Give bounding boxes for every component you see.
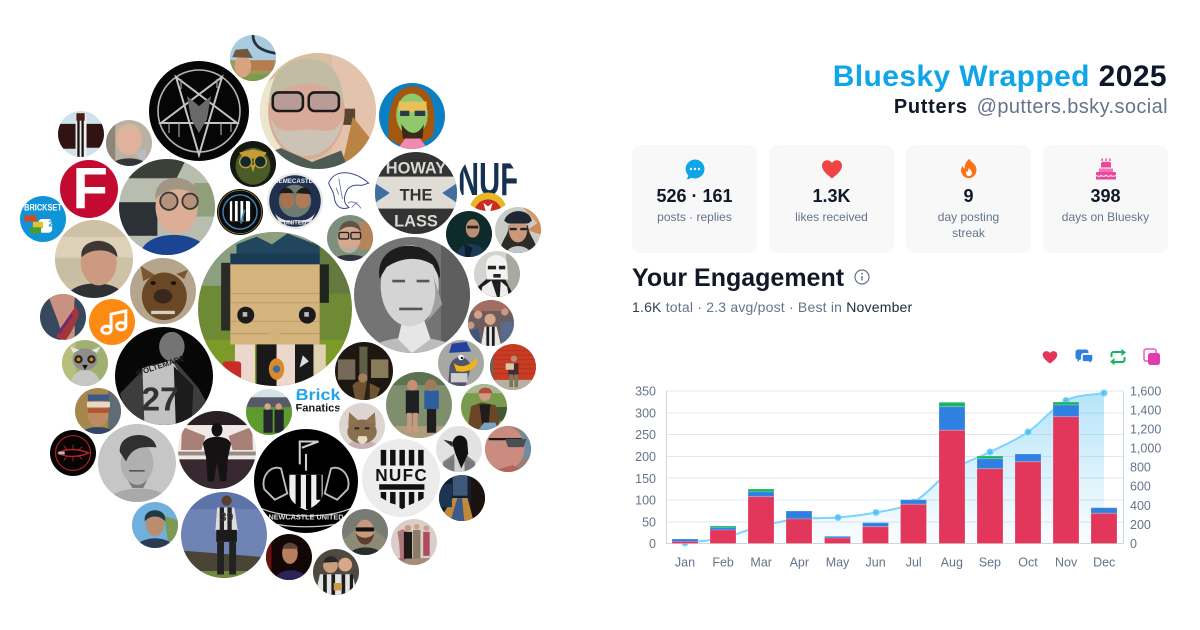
avatar: Brickset logo [20, 196, 66, 242]
stat card: days on Bluesky: 398 [1090, 186, 1121, 206]
bar: Apr [786, 511, 812, 544]
right axis labels: 1,600 [1130, 384, 1161, 398]
avatar: man with hat and jacket in park [461, 384, 507, 430]
avatar: shaggy dog puppet [130, 258, 196, 324]
avatar: blue-line dog sketch [328, 172, 370, 209]
avatar: footballer Woltemade number 27: WOLTEMADE [135, 354, 186, 378]
avatar: man with glasses on a bus [119, 159, 215, 255]
avatar: footballer Woltemade number 27 [115, 327, 213, 425]
month labels: Jun [866, 556, 886, 570]
avatar: man with cap and glasses [495, 207, 541, 253]
profile name and handle: Putters @putters.bsky.social [894, 96, 1168, 118]
avatar: Brick Fanatics logo [295, 378, 341, 424]
month labels: May [826, 556, 850, 570]
month labels: Jul [906, 556, 922, 570]
avatar: tattoo on skin [40, 294, 86, 340]
icon: heart [820, 158, 842, 180]
avatar: Howay The Lass [375, 152, 457, 234]
avatar: red lobster badge [50, 430, 96, 476]
month labels: Feb [712, 556, 734, 570]
stat card: day posting streak: streak [952, 226, 985, 240]
avatar: bald man smiling [106, 120, 152, 166]
left axis labels: 250 [635, 428, 656, 442]
engagement summary line: 1.6K total · 2.3 avg/post · Best in November [632, 299, 912, 315]
stat card: posts and replies [632, 145, 757, 253]
month labels: Oct [1018, 556, 1038, 570]
icon: chat bubble [684, 158, 706, 180]
avatar: Howay The Lass: LASS [394, 213, 438, 231]
avatar: Howay The Lass: THE [400, 186, 432, 204]
right axis labels [1130, 384, 1161, 551]
right axis labels: 1,200 [1130, 422, 1161, 436]
title: Bluesky Wrapped 2025 [833, 60, 1167, 93]
icon: likes heart [1042, 349, 1058, 365]
avatar: bald man with beard on bridge [342, 509, 388, 555]
bar: May [824, 536, 850, 544]
stat card: day posting streak [906, 145, 1031, 253]
avatar: two men on pitch [246, 389, 292, 435]
left axis labels: 200 [635, 450, 656, 464]
left axis labels: 350 [635, 384, 656, 398]
stat card: days on Bluesky [1043, 145, 1168, 253]
bar: Jan [672, 539, 698, 544]
avatar: woman in pub at night [335, 342, 393, 400]
icon: replies bubbles [1075, 348, 1093, 366]
avatar: man indoors in dark hoodie [55, 220, 133, 298]
stat card: likes received [769, 145, 894, 253]
stat card: day posting streak: day posting [938, 210, 999, 224]
avatar: striped statue [58, 111, 104, 157]
bar: Jun [862, 523, 888, 544]
avatar: Howay The Lass: HOWAY [386, 159, 446, 177]
left axis labels: 50 [642, 516, 656, 530]
avatar: stadium silhouette [178, 411, 256, 489]
bar: Mar [748, 489, 774, 544]
bar: Jul [900, 500, 926, 544]
avatar: colourful pop-art portrait [379, 83, 445, 149]
avatar: black-and-white stripes badge [217, 189, 263, 235]
right axis labels: 600 [1130, 480, 1151, 494]
avatar: man on dark red background [266, 534, 312, 580]
avatar: man before red shutter [490, 344, 536, 390]
month labels: Dec [1093, 556, 1115, 570]
avatar: Memecastle United badge: MEMECASTLE [273, 178, 317, 185]
avatar: Newcastle United crest: NEWCASTLE UNITED [268, 512, 344, 521]
month labels: Apr [790, 556, 809, 570]
avatar: black-and-white portrait [354, 237, 470, 353]
left axis labels [635, 384, 656, 551]
avatar: player number 39: 39 [220, 510, 234, 524]
right axis labels: 0 [1130, 537, 1137, 551]
bar: Dec [1091, 508, 1117, 544]
right axis labels: 200 [1130, 518, 1151, 532]
cumulative area and line [682, 390, 1107, 546]
left axis labels: 100 [635, 494, 656, 508]
avatar: man in dark suit [446, 211, 492, 257]
avatar: orange music note [89, 299, 135, 345]
icon: birthday cake [1094, 158, 1116, 180]
bar: Nov [1053, 402, 1079, 544]
stacked bars: likes, replies, reposts [672, 402, 1117, 544]
month labels: Jan [675, 556, 695, 570]
stat card: posts and replies: posts · replies [657, 210, 732, 224]
bar: Sep [977, 456, 1003, 544]
heading: Your Engagement: Your Engagement [632, 264, 844, 292]
right axis labels: 1,400 [1130, 404, 1161, 418]
avatar: lemur [62, 340, 108, 386]
left axis labels: 150 [635, 472, 656, 486]
right axis labels: 800 [1130, 460, 1151, 474]
avatar: man in beanie [132, 502, 178, 548]
stat card: likes received: 1.3K [812, 186, 851, 206]
avatar: Brick Fanatics logo: Brick [295, 386, 341, 404]
avatar: man with cap outdoors [230, 35, 276, 81]
chart legend icons [1040, 347, 1164, 367]
month labels: Sep [979, 556, 1001, 570]
avatar: red F logo [60, 160, 118, 218]
left axis labels: 300 [635, 406, 656, 420]
avatar: man with white beard and glasses [260, 53, 376, 169]
right axis labels: 400 [1130, 499, 1151, 513]
avatar: footballer Woltemade number 27: 27 [142, 381, 179, 418]
icon: info [854, 269, 870, 285]
icon: repost arrows [1109, 348, 1127, 366]
month labels: Aug [941, 556, 963, 570]
avatar: Memecastle United badge [267, 173, 323, 229]
avatar: man in novelty glasses [75, 388, 121, 434]
avatar: NUFC Leeds: NUFC [375, 465, 427, 485]
avatar bubble cluster [20, 35, 541, 595]
avatar: Brick Fanatics logo: Fanatics [295, 403, 341, 415]
avatar: two fans in stripes [313, 549, 359, 595]
bar: Feb [710, 526, 736, 544]
avatar: grey portrait of young man [98, 424, 176, 502]
icon: flame [958, 158, 980, 180]
right axis labels: 1,000 [1130, 442, 1161, 456]
engagement chart [620, 380, 1180, 580]
avatar: player number 39 [181, 492, 267, 578]
avatar: rainy alley [439, 475, 485, 521]
avatar: two walkers on a trail [386, 372, 452, 438]
avatar: Brickset logo: 25 [49, 219, 58, 228]
stat card: posts and replies: 526 · 161 [656, 186, 733, 206]
left axis labels: 0 [649, 537, 656, 551]
stat card: days on Bluesky: days on Bluesky [1062, 210, 1149, 224]
stat card: likes received: likes received [795, 210, 868, 224]
bar: Aug [939, 402, 965, 544]
stat card: day posting streak: 9 [963, 186, 974, 206]
bar: Oct [1015, 454, 1041, 544]
avatar: Memecastle United badge: UNITED [284, 220, 307, 227]
month labels: Nov [1055, 556, 1078, 570]
avatar: magpie in ruff [436, 426, 482, 472]
avatar: Newcastle United crest [254, 429, 358, 533]
avatar: grinning man with glasses [327, 215, 373, 261]
avatar: stormtrooper [474, 251, 520, 297]
month labels: Mar [750, 556, 772, 570]
avatar: football fans [468, 300, 514, 346]
month labels [675, 556, 1115, 570]
avatar: LEGO BrickHeadz figure [198, 232, 352, 386]
avatar: man with reflective sunglasses [485, 426, 531, 472]
avatar: trio of cut-outs [391, 519, 437, 565]
avatar: owl with sunglasses [230, 141, 276, 187]
avatar: pentagram [149, 61, 249, 161]
icon: quotes stacked squares [1143, 348, 1161, 366]
avatar: NUFC Leeds [362, 439, 440, 517]
avatar: tabby cat [339, 403, 385, 449]
avatar: cartoon duck [438, 340, 484, 386]
